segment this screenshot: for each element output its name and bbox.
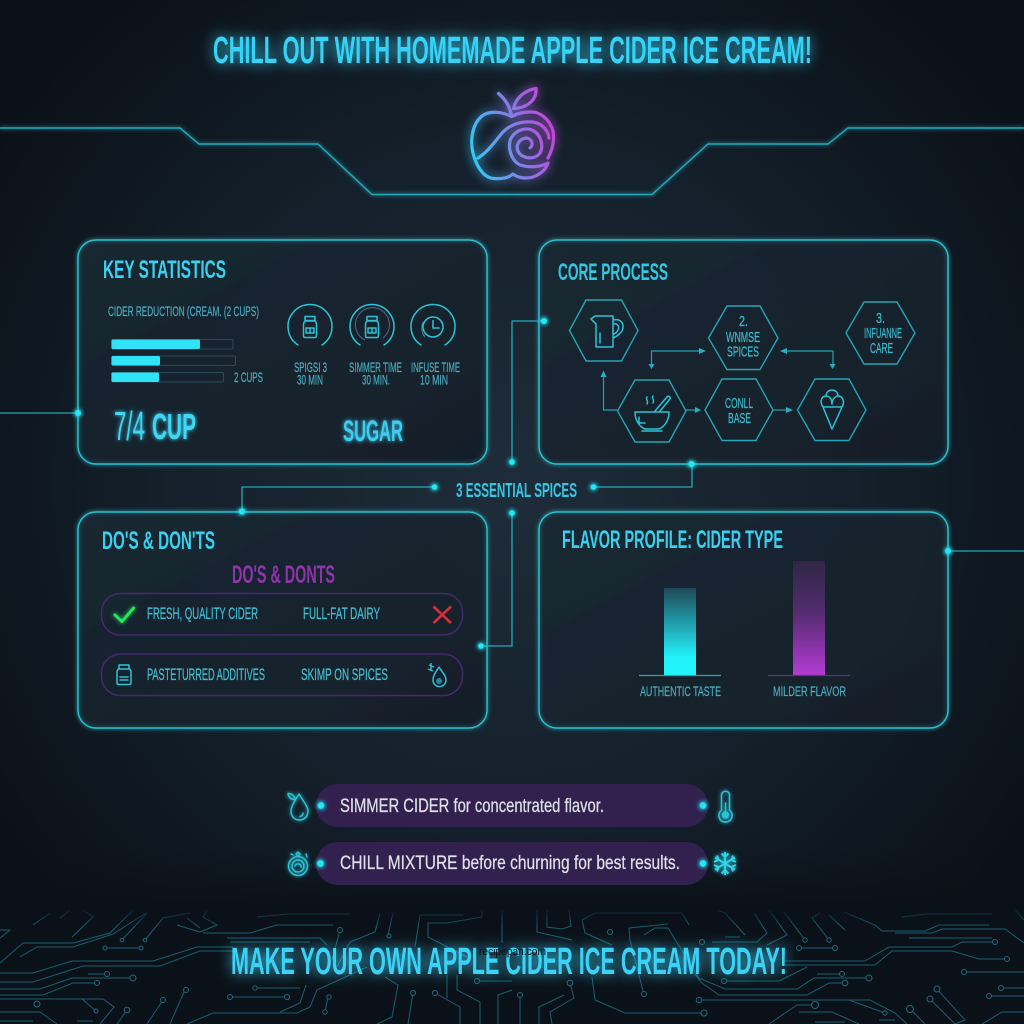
bar: authentic taste [639, 588, 721, 699]
hexagon: chill base [705, 379, 773, 440]
tip: chill mixture [316, 842, 708, 885]
gauge: infuse time: INFUSE TIME [411, 359, 460, 375]
tip: simmer cider: SIMMER CIDER for concentrated flavor. [340, 795, 604, 817]
stat: sugar: SUGAR [343, 415, 403, 448]
arrows between steps [600, 348, 836, 413]
hexagon: step 2 immerse spices: 2. [739, 314, 748, 330]
icon: spice drop [428, 663, 446, 686]
header circuit line, right [512, 128, 1024, 194]
bottom dark band [0, 850, 1024, 1024]
connector: spices to do's panel [239, 484, 437, 514]
watermark: recipepan.com [479, 946, 546, 958]
row: additives and spices [102, 654, 462, 696]
icon: thermometer [719, 791, 732, 822]
hexagon: ice cream cone [798, 379, 866, 440]
icon: jar [117, 665, 131, 684]
stat: 7/4 cup: 7/4 [114, 403, 145, 449]
bar: milder flavor: MILDER FLAVOR [773, 683, 846, 699]
gauge: spices: 30 MIN [297, 372, 323, 388]
hexagon: step 3 infuse: CARE [870, 341, 893, 357]
heading: core process: CORE PROCESS [558, 259, 668, 286]
heading: do's and don'ts: DO'S & DON'TS [102, 527, 215, 555]
row: fresh cider and full-fat dairy [102, 594, 462, 635]
bar chart: cider reduction: CIDER REDUCTION (CREAM. (2 CUPS) [108, 303, 259, 319]
row: additives and spices: PASTETURRED ADDITIVES [147, 666, 265, 684]
panel: key statistics [78, 240, 487, 464]
bar: authentic taste: AUTHENTIC TASTE [640, 683, 721, 699]
circuit pattern top fade [0, 905, 1024, 927]
hexagon: step 2 immerse spices: WNMSE [726, 330, 760, 346]
stat: 7/4 cup: CUP [152, 406, 196, 447]
bar chart: cider reduction [108, 303, 263, 385]
hexagon: step 2 immerse spices: SPICES [727, 344, 759, 360]
gauge: simmer time: SIMMER TIME [349, 359, 402, 375]
row: fresh cider and full-fat dairy: FRESH, QUALITY CIDER [147, 605, 258, 623]
hexagon: simmering bowl step [618, 380, 686, 442]
tip: simmer cider [316, 784, 708, 827]
connector: right from flavor profile [945, 548, 1024, 554]
gauge: simmer time: 30 MIN. [362, 372, 390, 388]
subheading: do's and donts: DO'S & DONTS [232, 561, 335, 589]
row: additives and spices: SKIMP ON SPICES [301, 666, 388, 684]
icon: swirl with sparkles [288, 852, 308, 876]
connector: spices to process panel [591, 461, 694, 490]
gauge: spices: SPIGSI 3 [294, 359, 327, 375]
label: 3 essential spices: 3 ESSENTIAL SPICES [456, 480, 577, 502]
bar chart: cider reduction: 2 CUPS [234, 369, 263, 385]
hexagon: step 3 infuse [846, 302, 915, 364]
panel: flavor profile [539, 512, 948, 728]
gauge: infuse time [411, 305, 460, 388]
row: fresh cider and full-fat dairy: FULL-FAT DAIRY [303, 605, 380, 623]
connector: statistics to process [509, 318, 547, 465]
icon: red cross [434, 606, 451, 623]
panel: core process [539, 240, 948, 464]
icon: snowflake [714, 852, 736, 875]
icon: green check [114, 607, 134, 622]
heading: flavor profile: FLAVOR PROFILE: CIDER TYPE [562, 526, 783, 554]
connector: left to key statistics [0, 410, 81, 416]
stat: 7/4 cup [114, 403, 196, 449]
bar: milder flavor [768, 561, 850, 699]
panel: do's and don'ts [78, 512, 487, 728]
hexagon: step 2 immerse spices [708, 306, 778, 370]
hexagon: step 3 infuse: INFUANNE [864, 326, 902, 342]
icon: apple with swirl [472, 88, 554, 179]
connector: center to do's row [478, 510, 515, 649]
icon: water drop with leaf [288, 794, 308, 820]
hexagon: step 3 infuse: 3. [876, 311, 885, 327]
hexagon: chill base: CONLL [725, 396, 753, 412]
heading: key statistics: KEY STATISTICS [103, 256, 226, 284]
circuit board pattern [0, 910, 1024, 1024]
tip: chill mixture: CHILL MIXTURE before churning for best results. [340, 852, 680, 874]
header circuit line, left [0, 128, 512, 194]
gauge: simmer time [349, 305, 402, 388]
hexagon: cider pitcher step [570, 300, 638, 361]
hexagon: chill base: BASE [728, 411, 751, 427]
gauge: spices [288, 305, 332, 388]
gauge: infuse time: 10 MIN [420, 372, 448, 388]
